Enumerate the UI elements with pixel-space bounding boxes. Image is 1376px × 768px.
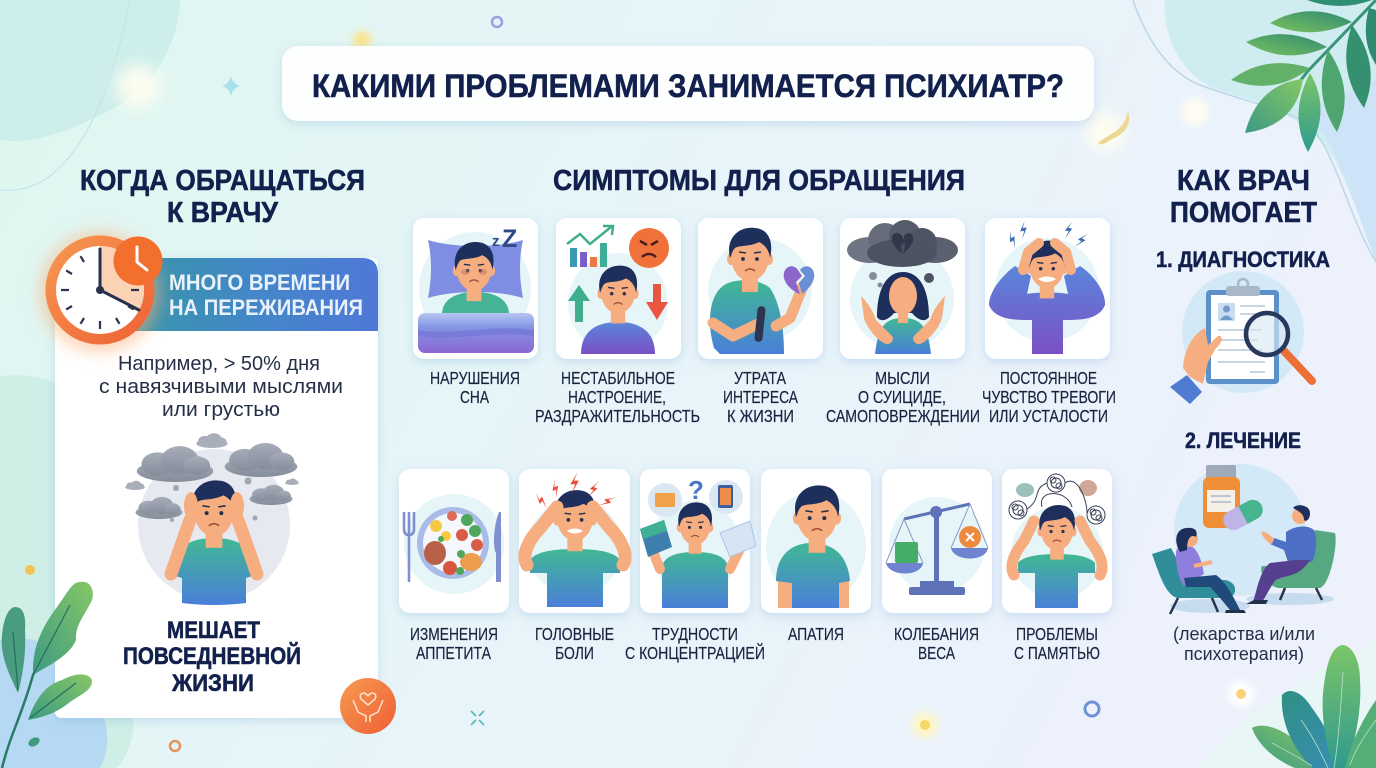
heading: when to see a doctor: К ВРАЧУ <box>167 197 279 229</box>
leaves: top right branch <box>1231 0 1376 152</box>
symptom label: headaches: БОЛИ <box>555 643 594 663</box>
icon: rising chart <box>567 226 613 267</box>
leaves: bottom right plant <box>1252 645 1376 768</box>
symptom label: sleep: СНА <box>460 387 489 407</box>
heading: when to see a doctor <box>80 165 365 229</box>
figure: patient in armchair <box>1152 528 1246 614</box>
symptom card: sleep problems: z <box>492 233 500 250</box>
symptom card: sleep problems: Z <box>502 225 517 253</box>
symptom card: loss of interest <box>698 218 823 359</box>
symptom label: anxiety: ИЛИ УСТАЛОСТИ <box>989 406 1108 426</box>
symptom card: apathy <box>761 469 871 613</box>
card header: МНОГО ВРЕМЕНИ <box>169 270 350 295</box>
symptom label: anxiety: ЧУВСТВО ТРЕВОГИ <box>982 387 1116 407</box>
icon: dark storm cloud <box>847 220 958 291</box>
symptom card: sleep problems <box>413 218 538 359</box>
symptom card: memory problems <box>1002 469 1112 613</box>
symptom label: interest: К ЖИЗНИ <box>727 406 794 426</box>
icon: pill bottle <box>1203 465 1266 534</box>
symptom label: memory <box>1014 624 1100 663</box>
symptom label: weight: КОЛЕБАНИЯ <box>894 624 979 644</box>
bottom message: ПОВСЕДНЕВНОЙ <box>123 642 301 670</box>
symptom label: memory: ПРОБЛЕМЫ <box>1016 624 1098 644</box>
symptom label: headaches: ГОЛОВНЫЕ <box>535 624 614 644</box>
title pill <box>282 46 1094 121</box>
symptom card: concentration difficulties <box>640 469 756 613</box>
symptom label: anxiety <box>982 368 1116 426</box>
symptom label: apathy: АПАТИЯ <box>788 624 844 644</box>
step 1 heading: diagnostics: 1. ДИАГНОСТИКА <box>1156 247 1330 272</box>
heading: how the doctor helps: КАК ВРАЧ <box>1177 165 1310 197</box>
symptom label: sleep: НАРУШЕНИЯ <box>430 368 520 388</box>
heading: how the doctor helps: ПОМОГАЕТ <box>1170 197 1317 229</box>
symptom label: mood <box>535 368 700 426</box>
figure: therapist in armchair <box>1246 505 1336 604</box>
symptom label: interest: УТРАТА <box>734 368 786 388</box>
symptom label: mood: НЕСТАБИЛЬНОЕ <box>561 368 675 388</box>
icon: angry face <box>629 228 669 268</box>
leaves: bottom left plant <box>2 582 93 768</box>
symptom label: concentration: ТРУДНОСТИ <box>652 624 738 644</box>
symptom card: suicidal thoughts <box>840 218 965 359</box>
icon: caring hands badge <box>340 678 396 734</box>
icon: tangled thoughts <box>1009 474 1105 524</box>
symptom card: headaches <box>519 469 630 613</box>
symptom label: suicide: САМОПОВРЕЖДЕНИИ <box>826 406 980 426</box>
symptom label: suicide <box>826 368 980 426</box>
example text: Например, > 50% дня <box>118 353 320 375</box>
symptom label: concentration <box>625 624 765 663</box>
heading: how the doctor helps <box>1170 165 1317 229</box>
icon: clipboard with magnifier <box>1170 271 1312 404</box>
heading: when to see a doctor: КОГДА ОБРАЩАТЬСЯ <box>80 165 365 197</box>
symptom label: appetite: АППЕТИТА <box>416 643 491 663</box>
treatment note: (лекарства и/или <box>1173 624 1315 644</box>
symptom label: anxiety: ПОСТОЯННОЕ <box>1000 368 1097 388</box>
symptom label: mood: НАСТРОЕНИЕ, <box>568 387 666 407</box>
card header <box>130 258 378 331</box>
symptom label: mood: РАЗДРАЖИТЕЛЬНОСТЬ <box>535 406 700 426</box>
treatment note: психотерапия) <box>1184 644 1304 664</box>
symptom label: interest: ИНТЕРЕСА <box>723 387 798 407</box>
symptom label: appetite: ИЗМЕНЕНИЯ <box>410 624 498 644</box>
symptom card: appetite changes <box>399 469 509 613</box>
illustration: overwhelmed man with clouds <box>125 433 299 605</box>
icon: clock <box>40 232 162 352</box>
bottom message: ЖИЗНИ <box>171 670 254 697</box>
step 2 heading: treatment: 2. ЛЕЧЕНИЕ <box>1185 428 1301 453</box>
symptom card: constant anxiety <box>985 218 1110 359</box>
symptom label: sleep <box>430 368 520 407</box>
icon: plate with food <box>417 507 489 579</box>
symptom label: appetite <box>410 624 498 663</box>
symptom card: concentration difficulties: ? <box>688 475 704 505</box>
symptom label: interest <box>723 368 798 426</box>
treatment note <box>1173 624 1315 664</box>
panel: when to see a doctor card <box>40 232 396 734</box>
symptom label: concentration: С КОНЦЕНТРАЦИЕЙ <box>625 642 765 663</box>
symptom card: unstable mood <box>556 218 681 359</box>
example text: с навязчивыми мыслями <box>99 376 343 398</box>
symptom label: headaches <box>535 624 614 663</box>
card header: НА ПЕРЕЖИВАНИЯ <box>169 295 363 320</box>
symptom label: weight: ВЕСА <box>918 643 955 663</box>
bottom message <box>123 617 301 697</box>
icon: balance scales <box>886 504 988 595</box>
symptom label: suicide: О СУИЦИДЕ, <box>858 387 946 407</box>
symptom label: suicide: МЫСЛИ <box>875 368 930 388</box>
symptom card: weight fluctuations <box>882 469 992 613</box>
example text: или грустью <box>162 399 280 421</box>
example text <box>99 353 343 421</box>
title pill: КАКИМИ ПРОБЛЕМАМИ ЗАНИМАЕТСЯ ПСИХИАТР? <box>312 68 1064 104</box>
heading: symptoms: СИМПТОМЫ ДЛЯ ОБРАЩЕНИЯ <box>553 165 965 197</box>
symptom label: memory: С ПАМЯТЬЮ <box>1014 643 1100 663</box>
illustration: medication and therapy session <box>1152 464 1336 614</box>
symptom label: weight <box>894 624 979 663</box>
bottom message: МЕШАЕТ <box>167 617 260 644</box>
